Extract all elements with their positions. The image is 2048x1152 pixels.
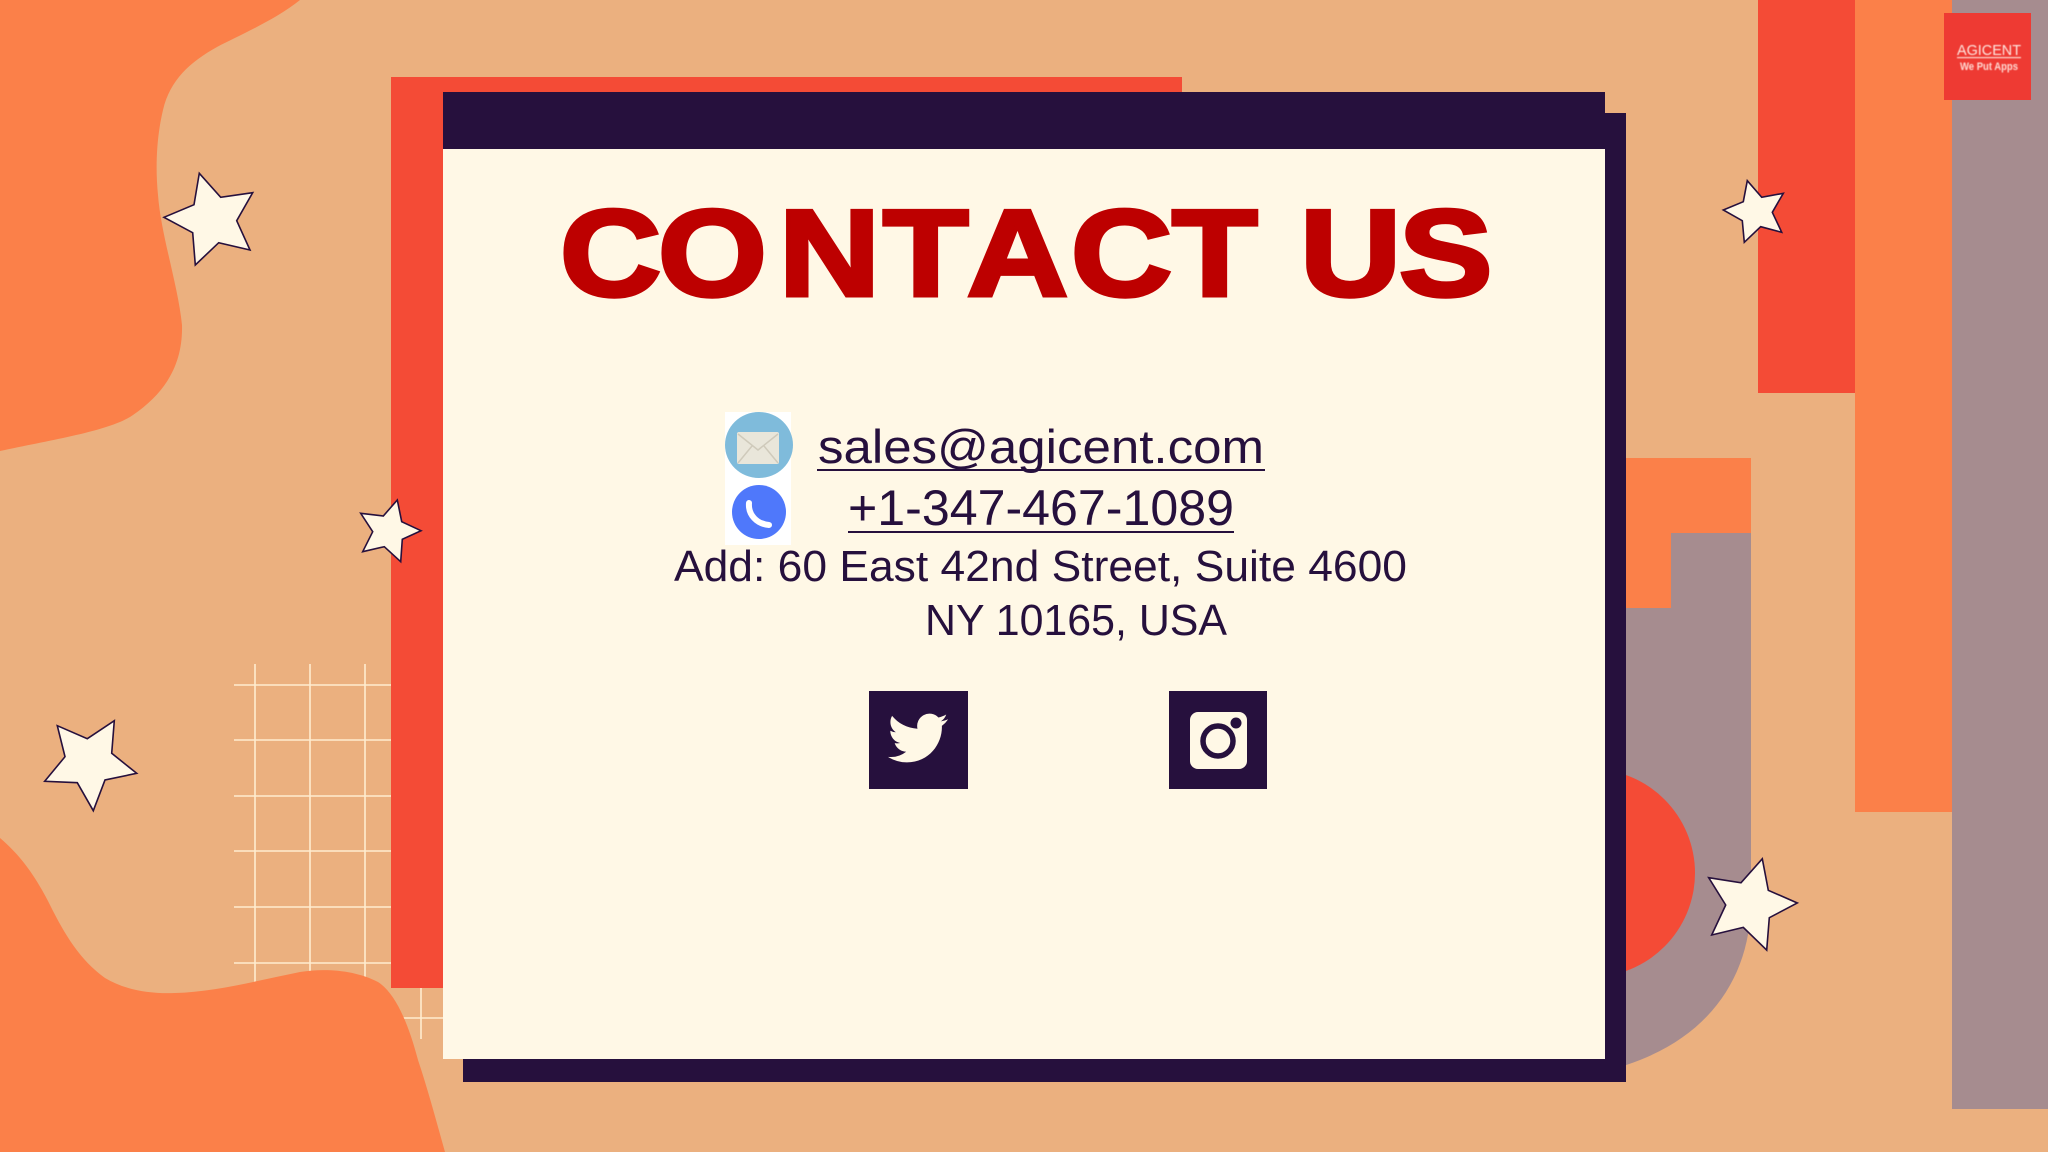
icon: twitter — [869, 691, 968, 789]
panel: cream card — [443, 149, 1605, 1059]
blob: bottom-left orange — [0, 838, 445, 1152]
shape: red circle — [1487, 769, 1695, 977]
logo: Agicent: We Put Apps — [1960, 61, 2018, 73]
star: top right — [1723, 181, 1783, 242]
panel: dark header band — [443, 92, 1605, 150]
block: right red bar — [1758, 0, 1855, 393]
shape: orange stepped block — [1600, 458, 1751, 608]
block: right grey bar — [1952, 0, 2048, 1109]
logo: Agicent: AGICENT — [1957, 42, 2021, 59]
panel: dark shadow frame — [463, 113, 1626, 1082]
logo: Agicent — [1944, 13, 2031, 100]
icon: instagram — [1169, 691, 1267, 789]
shape: grey rounded block — [1600, 533, 1751, 1072]
address line 1: Add: 60 East 42nd Street, Suite 4600 — [674, 542, 1407, 591]
address line 2: NY 10165, USA — [925, 596, 1228, 645]
star: lower left — [45, 721, 137, 811]
panel: red back frame — [391, 77, 1182, 988]
title: CONTACT US — [560, 184, 1492, 322]
star: middle left — [361, 500, 421, 562]
phone link: +1-347-467-1089 — [848, 480, 1234, 536]
star: top left — [164, 173, 253, 265]
icon: phone — [725, 478, 791, 545]
block: right orange bar — [1855, 0, 1952, 812]
icon: email — [725, 412, 793, 478]
star: lower right — [1709, 859, 1797, 950]
blob: top-left orange — [0, 0, 300, 451]
email link: sales@agicent.com — [818, 420, 1264, 473]
